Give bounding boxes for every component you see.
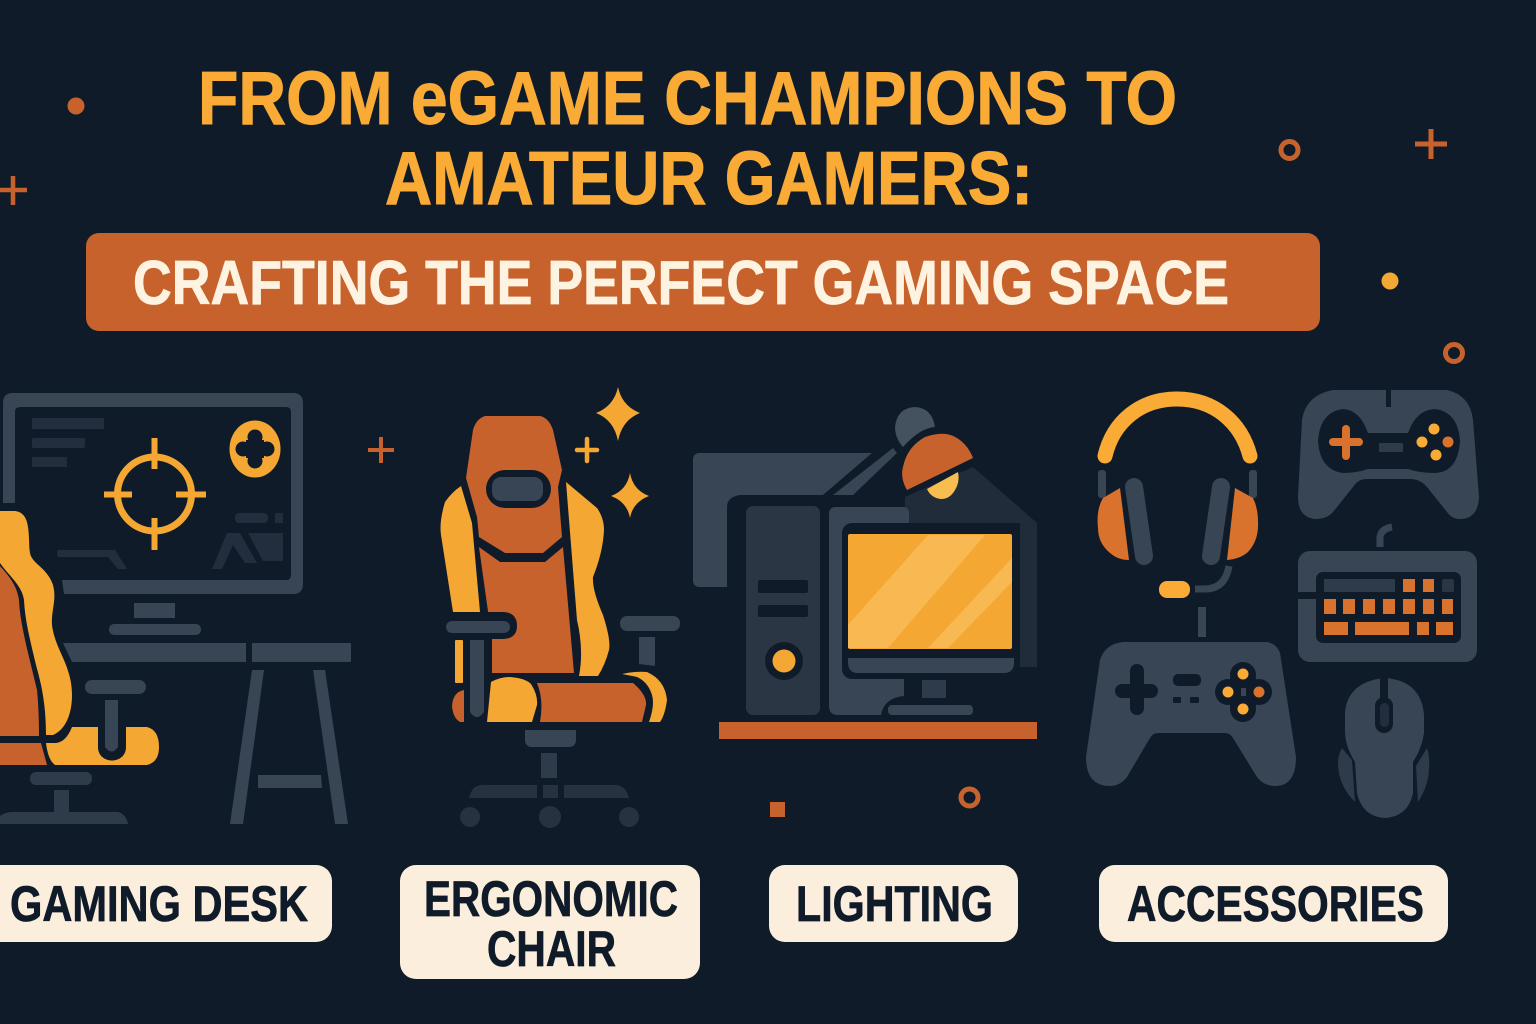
side panel — [829, 507, 909, 715]
left armrest — [446, 612, 517, 723]
mouse — [1338, 678, 1429, 818]
title: FROM eGAME CHAMPIONS TO — [198, 56, 1177, 140]
pc tower — [746, 506, 820, 715]
glow from lamp — [905, 467, 1037, 667]
label: ergonomic chair — [400, 865, 700, 979]
headset — [1098, 399, 1258, 637]
backrest — [479, 547, 574, 673]
lamp joint — [895, 407, 935, 447]
illustration: gaming desk — [0, 393, 351, 824]
label: accessories — [1099, 865, 1448, 942]
chair base and wheels — [460, 730, 639, 828]
monitor stand — [881, 680, 973, 715]
decorative sparkles and dots — [0, 98, 1462, 817]
glowing monitor — [848, 534, 1014, 673]
desk surface — [719, 722, 1037, 739]
sparkles — [577, 387, 649, 518]
subtitle banner — [86, 233, 1320, 331]
right armrest — [620, 616, 680, 666]
label: ergonomic chair: CHAIR — [487, 921, 616, 977]
monitor stand — [109, 603, 201, 635]
wall shelf — [693, 453, 872, 587]
clover badge — [230, 420, 280, 478]
title: AMATEUR GAMERS: — [385, 136, 1033, 220]
large controller — [1086, 642, 1296, 786]
small controller — [1298, 389, 1479, 519]
lamp bulb — [927, 472, 959, 499]
label: lighting: LIGHTING — [796, 876, 993, 932]
side bolsters — [440, 482, 609, 683]
desk — [63, 643, 351, 824]
subtitle banner: CRAFTING THE PERFECT GAMING SPACE — [133, 249, 1229, 318]
lamp shade — [902, 434, 973, 490]
label: lighting — [769, 865, 1018, 942]
seat cushion — [452, 672, 667, 722]
monitor frame — [3, 393, 303, 594]
title — [198, 56, 1177, 220]
label: gaming desk — [0, 865, 332, 942]
illustration: lighting and desktop pc — [693, 407, 1037, 739]
illustration: ergonomic chair — [440, 387, 680, 828]
label: ergonomic chair: ERGONOMIC — [424, 871, 678, 927]
illustration: accessories — [1086, 389, 1479, 818]
headrest — [466, 416, 562, 553]
label: accessories: ACCESSORIES — [1127, 876, 1424, 932]
crosshair icon — [104, 438, 206, 550]
label: gaming desk: GAMING DESK — [10, 876, 308, 932]
lamp arm — [833, 448, 897, 495]
gaming chair, cropped — [0, 511, 159, 824]
screen interface bars — [32, 418, 283, 569]
headrest cushion — [486, 470, 551, 508]
keyboard — [1298, 527, 1477, 662]
